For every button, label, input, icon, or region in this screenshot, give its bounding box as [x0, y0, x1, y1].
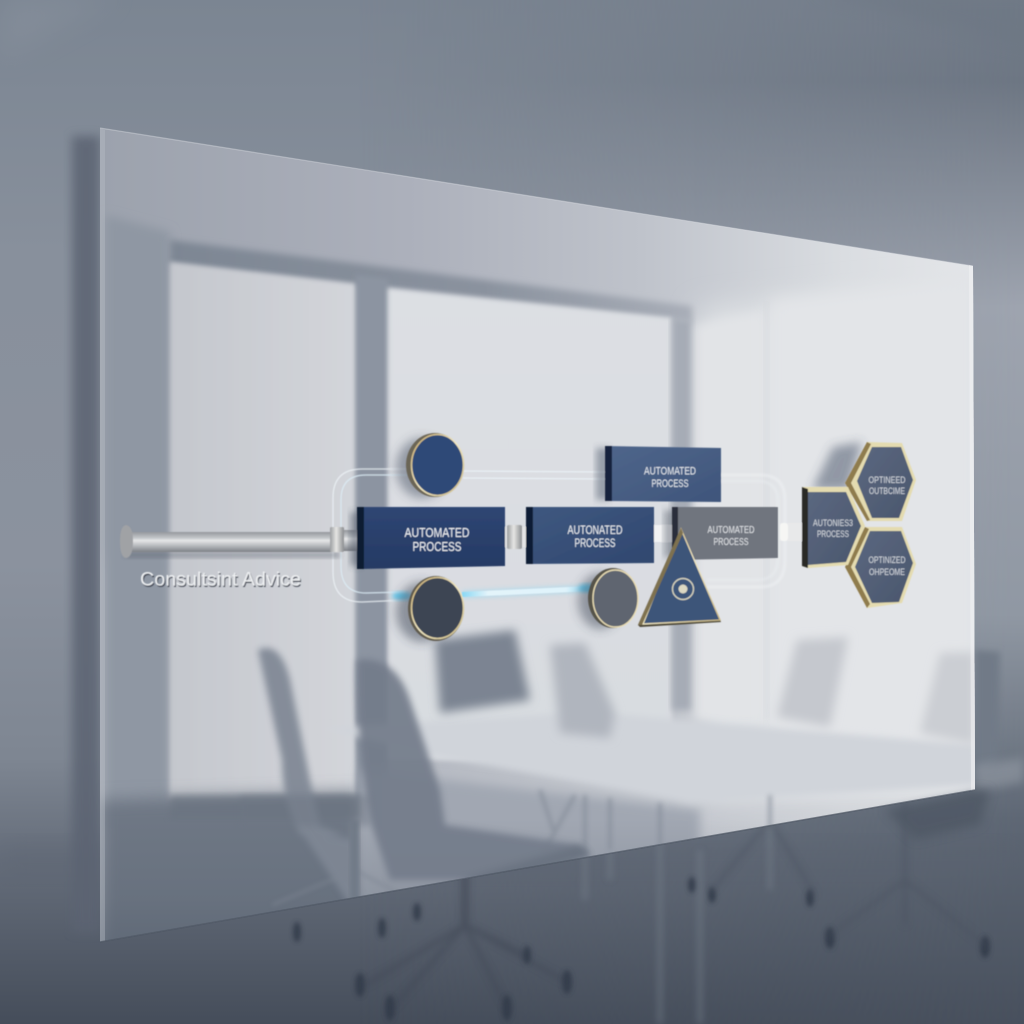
glass edges	[100, 128, 973, 266]
gray process box: PROCESS	[714, 536, 748, 548]
label: consultant advice: Consultsint Advice	[140, 570, 301, 590]
main pipe	[120, 525, 360, 558]
first process box: PROCESS	[412, 539, 462, 554]
icon: target	[672, 578, 694, 600]
process diagram	[120, 433, 916, 642]
hexagon: optimized outcome top	[845, 442, 916, 521]
circle node: bottom dark	[396, 576, 464, 642]
label: consultant advice: Consultsint Advice	[141, 571, 302, 592]
far wall floor band	[100, 792, 360, 960]
right chair reflection	[904, 788, 971, 802]
first process box	[350, 507, 505, 569]
second process box	[526, 507, 654, 564]
connector: top lines	[463, 471, 606, 479]
pentagon box: process: AUTONIES3	[813, 518, 853, 529]
gray process box	[664, 507, 778, 560]
panel shadow on wall	[72, 136, 100, 932]
connector: glowing bottom line	[392, 584, 597, 600]
circle node: bottom gray	[578, 568, 638, 629]
top process box: AUTOMATED	[644, 466, 696, 478]
pentagon box: process	[802, 487, 865, 568]
back chairs	[435, 630, 975, 745]
hexagon: optimized outcome bottom: OPTINIZED	[868, 555, 906, 566]
second process box: PROCESS	[574, 536, 616, 550]
hexagon: optimized outcome top: OUTBCIME	[869, 486, 905, 497]
connector pipe between first and second box	[505, 525, 531, 549]
room reflection in glass	[100, 215, 990, 960]
circle node: top navy	[396, 433, 464, 498]
connector pipe to gray box	[653, 525, 674, 542]
connector: left light loop	[333, 469, 407, 602]
panel: glass board	[100, 128, 990, 960]
connector: right light loop	[707, 475, 785, 587]
hexagon: optimized outcome bottom	[845, 527, 916, 608]
hexagon: optimized outcome top: OPTINEED	[868, 475, 906, 486]
connector pipe to hex cluster	[780, 523, 804, 541]
triangle node with target icon	[638, 528, 721, 627]
second process box: AUTONATED	[568, 523, 623, 537]
first process box: AUTOMATED	[404, 525, 470, 540]
floor reflections outside glass	[293, 650, 1024, 1024]
reflected table	[354, 720, 971, 802]
gray process box: AUTOMATED	[708, 524, 755, 536]
front chair	[357, 660, 590, 880]
hexagon: optimized outcome bottom: OHPEOME	[869, 567, 905, 578]
top process box: PROCESS	[652, 478, 688, 490]
hex cluster shadow	[812, 442, 862, 490]
top process box	[596, 446, 721, 502]
left chair	[258, 648, 360, 905]
table legs	[538, 790, 774, 848]
pentagon box: process: PROCESS	[817, 529, 849, 540]
